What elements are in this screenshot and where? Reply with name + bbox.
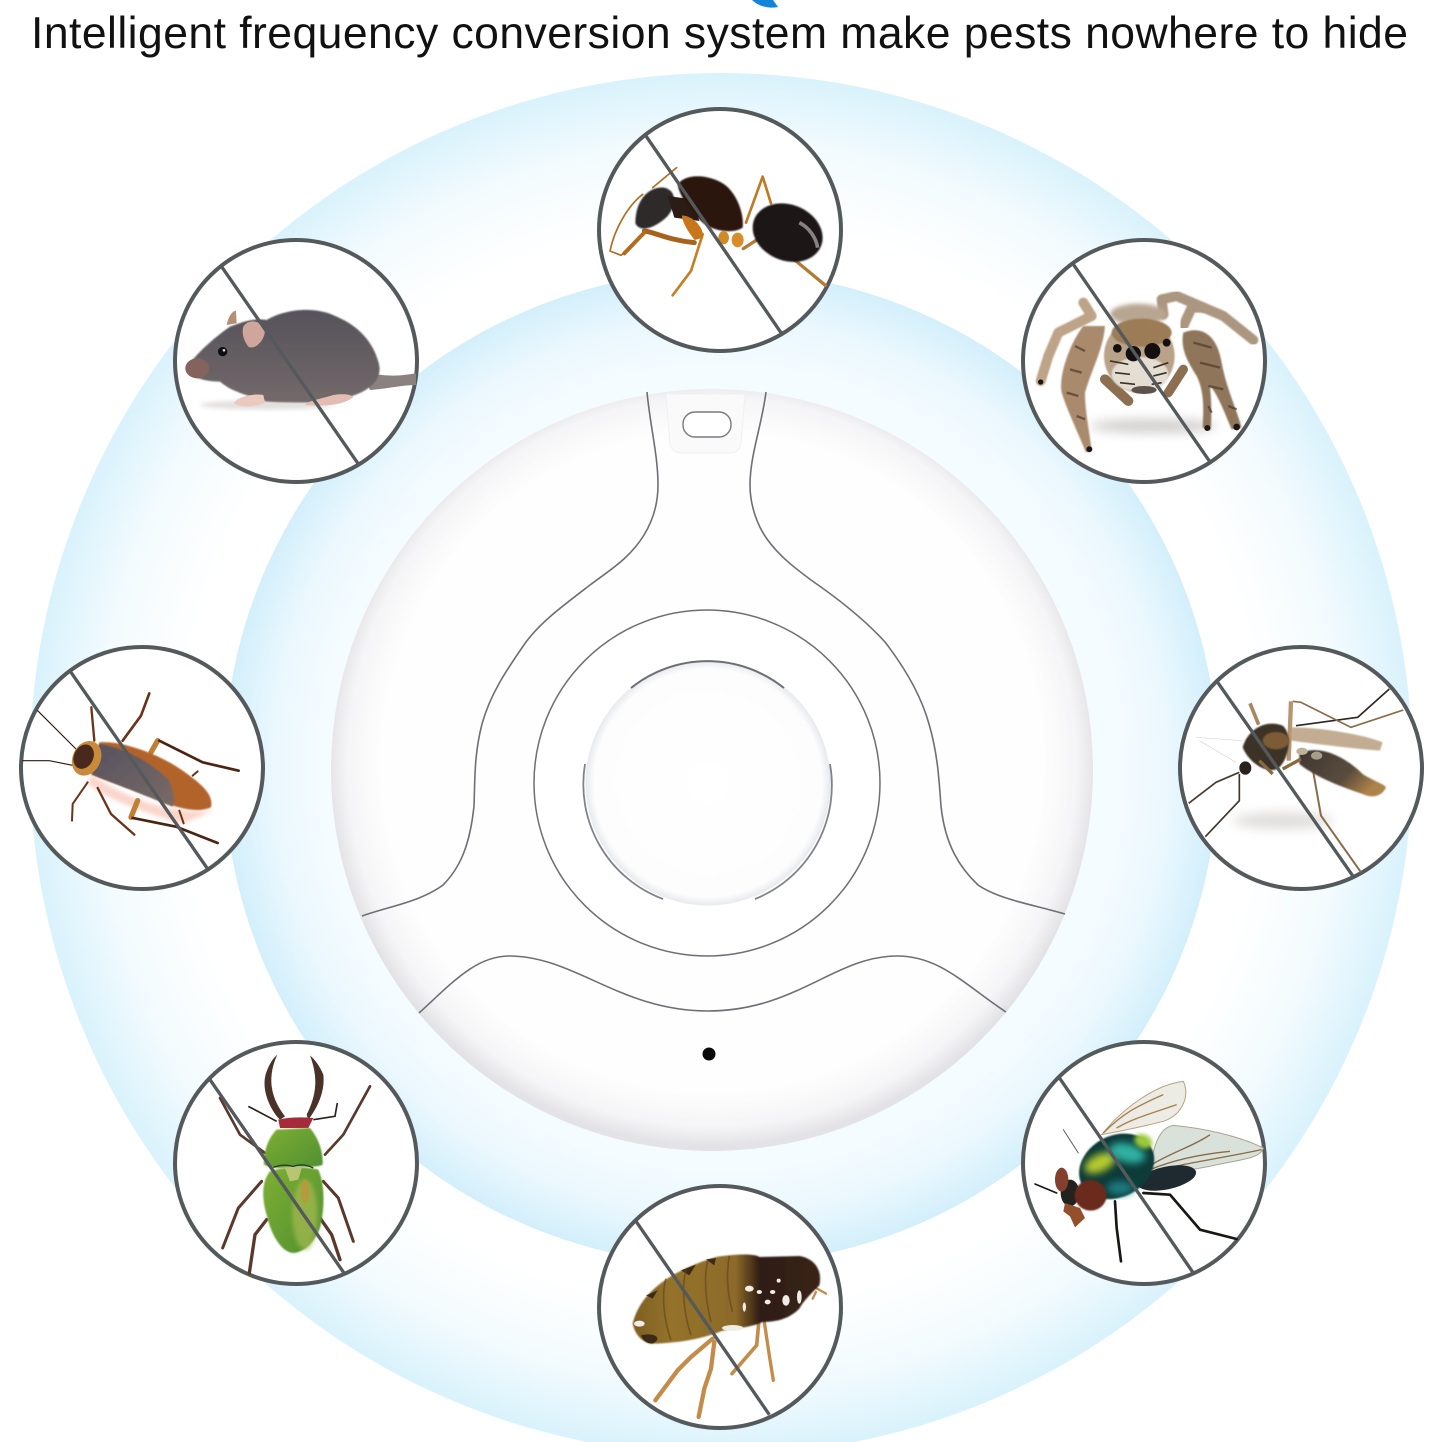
badge: rat <box>175 240 417 482</box>
device body seams <box>362 392 1065 1013</box>
badge: beetle <box>175 1042 417 1284</box>
blue logo fragment <box>752 0 778 8</box>
device indicator hole <box>702 1048 716 1060</box>
badge: flea <box>599 1186 841 1428</box>
badge: fly <box>1023 1042 1265 1284</box>
fly illustration <box>1035 1076 1263 1273</box>
device: ultrasonic repeller <box>331 389 1093 1151</box>
mosquito illustration <box>1189 682 1403 876</box>
badge: cockroach <box>21 647 263 889</box>
badge: ant <box>599 109 841 351</box>
spider illustration <box>1038 264 1253 461</box>
title: Intelligent frequency conversion system make pests nowhere to hide <box>31 9 1408 58</box>
ant illustration <box>610 136 832 333</box>
badge: spider <box>1023 240 1265 482</box>
device centre ring <box>534 610 880 956</box>
device centre button <box>583 660 832 906</box>
device body <box>331 389 1093 1151</box>
cockroach illustration <box>23 672 239 869</box>
beetle illustration <box>210 1055 370 1273</box>
badge: mosquito <box>1180 647 1422 889</box>
rat illustration <box>185 267 416 464</box>
device hanging lug <box>666 394 745 453</box>
inner sound wave ring <box>224 271 1218 1265</box>
flea illustration <box>633 1220 826 1417</box>
